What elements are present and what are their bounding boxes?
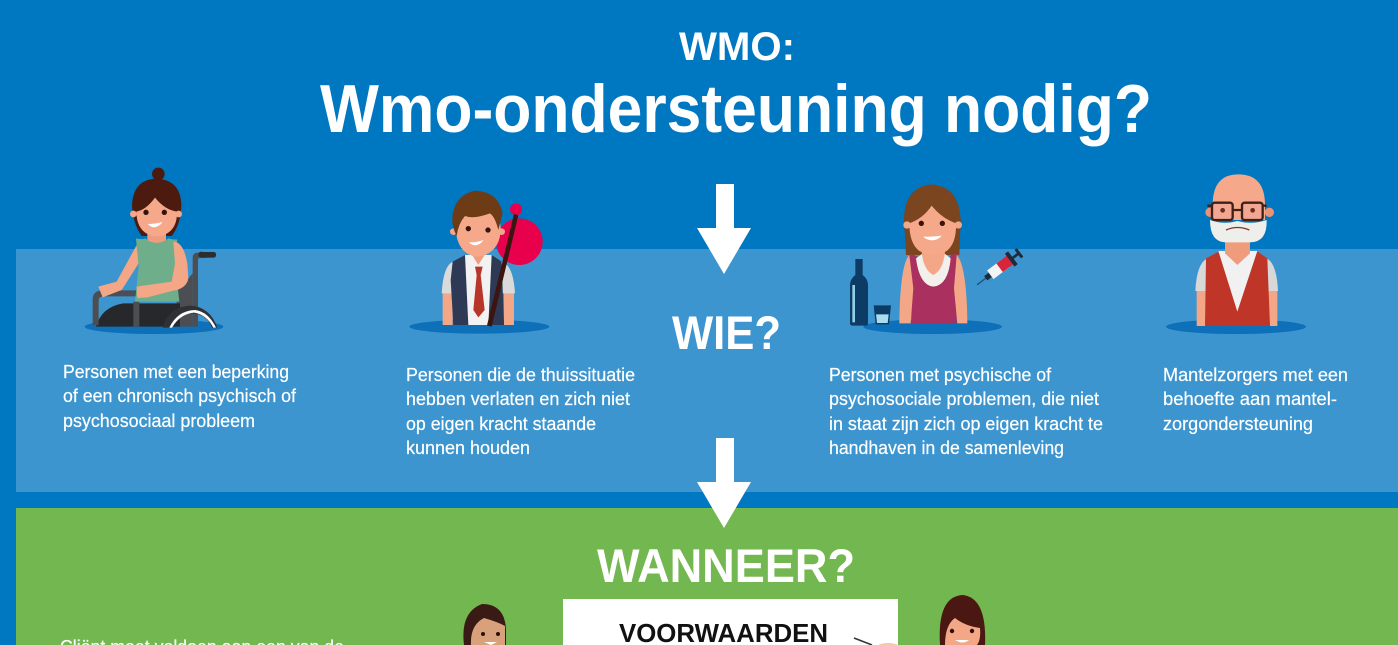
panel: wie bbox=[16, 249, 1398, 492]
text block: psychische problemen bbox=[829, 365, 1103, 458]
text block: beperking: of een chronisch psychisch of bbox=[63, 386, 297, 406]
text block: thuissituatie: op eigen kracht staande bbox=[406, 414, 596, 434]
text block: mantelzorgers: zorgondersteuning bbox=[1163, 414, 1313, 434]
icon: bald man with glasses bbox=[1166, 174, 1306, 334]
text block: thuissituatie: kunnen houden bbox=[406, 438, 530, 458]
text block: thuissituatie: hebben verlaten en zich niet bbox=[406, 389, 630, 409]
heading: wanneer: WANNEER? bbox=[597, 539, 855, 592]
icon: right woman bbox=[940, 595, 985, 645]
text block: psychische problemen: handhaven in de samenleving bbox=[829, 438, 1064, 458]
icon: woman with bottle and syringe bbox=[850, 184, 1025, 334]
text block: beperking bbox=[63, 362, 297, 431]
text block: psychische problemen: in staat zijn zich op eigen kracht te bbox=[829, 414, 1103, 434]
panel: wanneer bbox=[16, 508, 1398, 645]
text block: psychische problemen: psychosociale problemen, die niet bbox=[829, 389, 1099, 409]
icon: left woman bbox=[463, 604, 506, 645]
title: WMO: WMO: bbox=[679, 25, 795, 69]
text block: beperking: psychosociaal probleem bbox=[63, 411, 255, 431]
text block: psychische problemen: Personen met psychische of bbox=[829, 365, 1052, 385]
text block: mantelzorgers: behoefte aan mantel- bbox=[1163, 389, 1337, 409]
arrow: title to wie bbox=[697, 184, 751, 274]
icon: woman in wheelchair bbox=[85, 168, 223, 334]
text block: mantelzorgers: Mantelzorgers met een bbox=[1163, 365, 1348, 385]
text block: thuissituatie bbox=[406, 365, 635, 458]
text block: mantelzorgers bbox=[1163, 365, 1348, 434]
text block: beperking: Personen met een beperking bbox=[63, 362, 289, 382]
text block: thuissituatie: Personen die de thuissituatie bbox=[406, 365, 635, 385]
icon: pointer bbox=[854, 638, 898, 645]
heading: wie: WIE? bbox=[672, 306, 781, 359]
panel: voorwaarden card bbox=[563, 599, 898, 645]
arrow: wie to wanneer bbox=[697, 438, 751, 528]
icon: man with bundle bbox=[409, 191, 549, 334]
title: main heading: Wmo-ondersteuning nodig? bbox=[320, 71, 1152, 147]
